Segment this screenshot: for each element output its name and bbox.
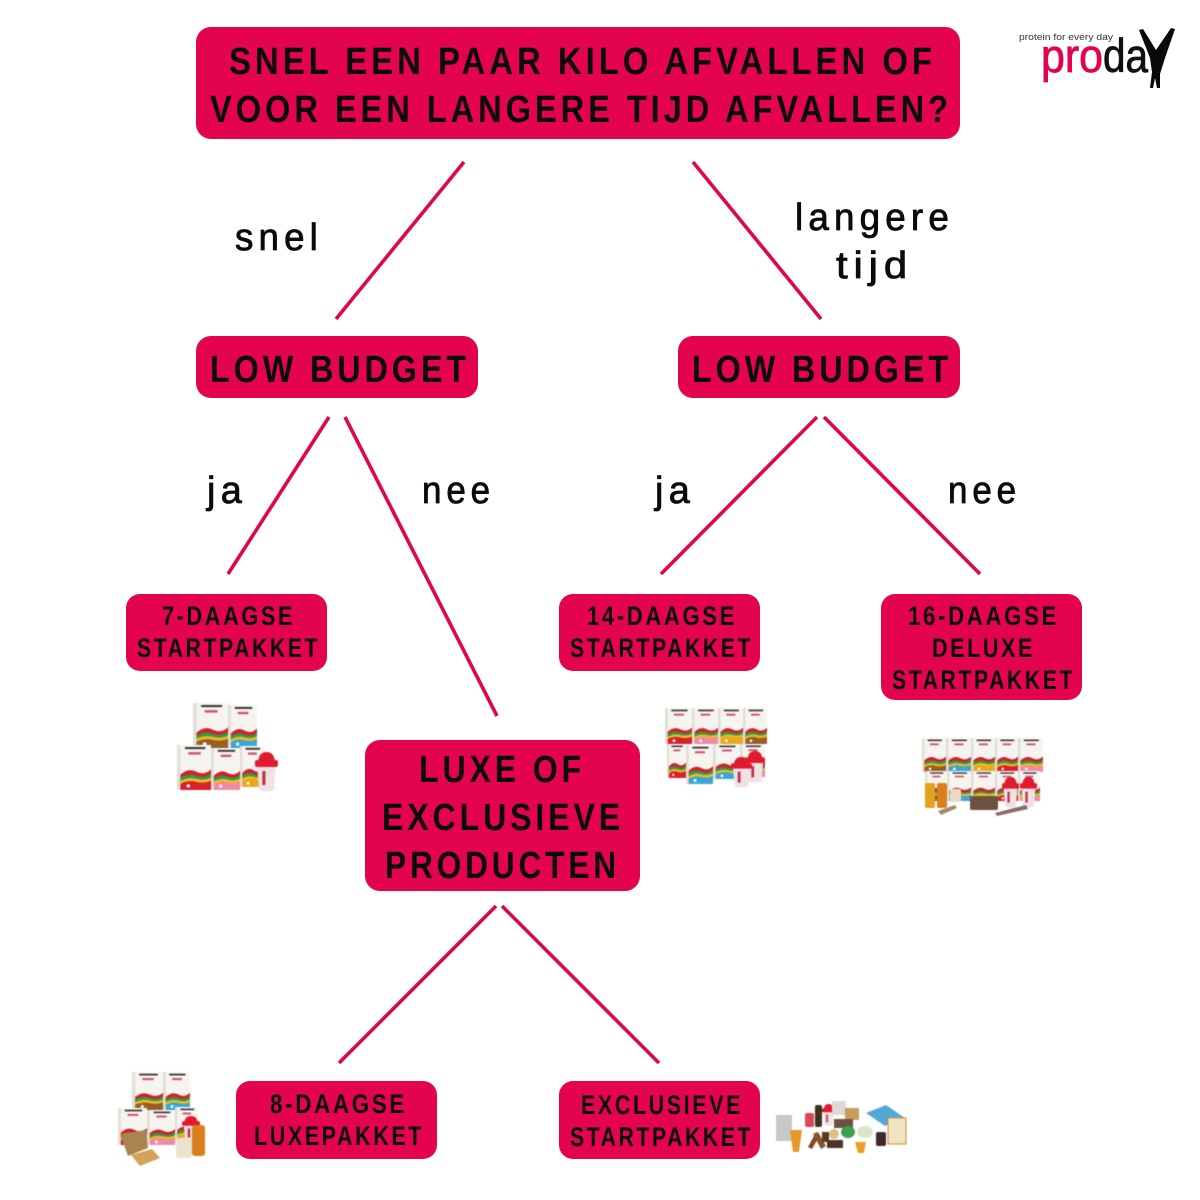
product photo: 7-daagse [177,703,278,792]
box: low budget left [196,336,478,398]
logo: proday: pro [1041,29,1103,82]
title box [196,27,960,139]
label: ja left: ja [206,470,247,512]
label: snel: snel [235,217,323,259]
box: luxe of exclusieve producten [365,740,640,891]
box: luxe of exclusieve producten: EXCLUSIEVE [382,797,624,839]
label: nee left: nee [422,470,495,512]
box: exclusieve startpakket: EXCLUSIEVE [581,1090,743,1120]
product photo: exclusieve startpakket [776,1101,906,1153]
box: exclusieve startpakket [559,1081,760,1159]
box: 8-daagse luxepakket: 8-DAAGSE [270,1089,407,1119]
box: exclusieve startpakket: STARTPAKKET [570,1122,753,1152]
box: 16-daagse deluxe startpakket [881,594,1082,700]
box: luxe of exclusieve producten: PRODUCTEN [385,845,620,887]
box: 8-daagse luxepakket [236,1081,437,1159]
box: 14-daagse startpakket [559,594,760,671]
logo: proday [1019,28,1175,88]
box: 8-daagse luxepakket: LUXEPAKKET [254,1121,424,1151]
box: luxe of exclusieve producten: LUXE OF [419,749,585,791]
box: 7-daagse startpakket: STARTPAKKET [137,633,320,663]
box: 14-daagse startpakket: 14-DAAGSE [587,601,737,631]
product photo: 16-daagse deluxe [922,738,1043,816]
box: low budget right: LOW BUDGET [692,349,952,391]
box: 16-daagse deluxe startpakket: STARTPAKKET [892,665,1075,695]
label: langere tijd [795,197,954,287]
label: ja right: ja [654,470,695,512]
product photo: 14-daagse [665,708,767,788]
product photo: 8-daagse luxepakket [118,1072,205,1166]
label: langere tijd: langere [795,197,954,239]
title box: SNEL EEN PAAR KILO AFVALLEN OF [229,41,936,83]
box: 7-daagse startpakket: 7-DAAGSE [162,601,295,631]
box: low budget right [678,336,960,398]
label: nee right: nee [948,470,1021,512]
title box: VOOR EEN LANGERE TIJD AFVALLEN? [210,89,952,131]
logo: proday: protein for every day [1019,32,1113,43]
box: low budget left: LOW BUDGET [210,349,470,391]
box: 7-daagse startpakket [126,594,327,671]
connector lines [228,162,980,1063]
box: 16-daagse deluxe startpakket: DELUXE [932,633,1035,663]
box: 16-daagse deluxe startpakket: 16-DAAGSE [908,601,1059,631]
logo: proday: da [1103,29,1149,82]
label: langere tijd: tijd [836,245,913,287]
box: 14-daagse startpakket: STARTPAKKET [570,633,753,663]
